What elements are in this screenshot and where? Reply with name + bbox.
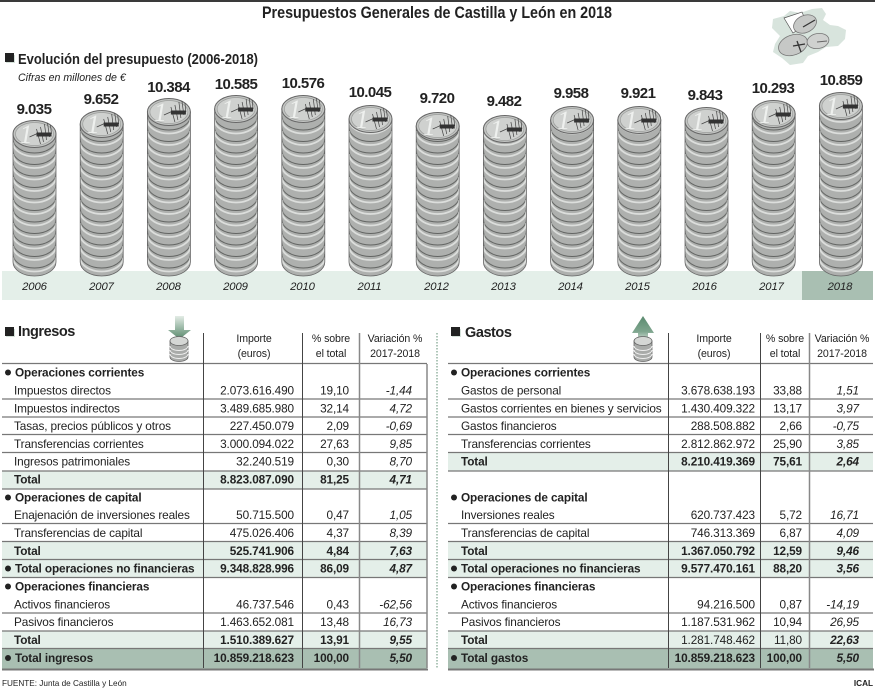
row: total operaciones no financieras: 9.577.470.161 xyxy=(681,562,756,576)
row: total: 9,55 xyxy=(390,633,413,647)
row: total: 9,46 xyxy=(837,544,860,558)
row xyxy=(14,402,413,416)
section: Operaciones de capital: Operaciones de capital xyxy=(15,490,142,504)
section: Operaciones corrientes: Operaciones corrientes xyxy=(15,366,145,380)
section: Operaciones financieras: Operaciones financieras xyxy=(15,580,150,594)
row: total: 13,91 xyxy=(320,633,350,647)
row: 4,37 xyxy=(327,526,349,540)
row: Inversiones reales xyxy=(461,508,555,522)
row: 1.463.652.081 xyxy=(220,615,294,629)
row: Transferencias corrientes xyxy=(14,437,144,451)
column headers: el total xyxy=(316,348,346,360)
icon: map of Castilla y León with coins xyxy=(772,8,846,65)
row: total operaciones no financieras xyxy=(5,562,414,576)
row: 32.240.519 xyxy=(236,454,294,468)
row: total ingresos: 100,00 xyxy=(314,651,350,665)
row: -62,56 xyxy=(379,598,413,612)
title: Presupuestos Generales de Castilla y León en 2018 xyxy=(262,4,612,22)
row: 50.715.500 xyxy=(236,508,295,522)
row: Impuestos indirectos xyxy=(14,402,120,416)
row: total operaciones no financieras: Total operaciones no financieras xyxy=(15,562,195,576)
column headers: (euros) xyxy=(238,348,270,360)
row xyxy=(14,615,413,629)
row: 6,87 xyxy=(780,526,802,540)
row: total operaciones no financieras: 86,09 xyxy=(320,562,350,576)
row: Enajenación de inversiones reales xyxy=(14,508,190,522)
stack 2018: 10.859 xyxy=(820,72,862,89)
row: Ingresos patrimoniales xyxy=(14,454,130,468)
row: 227.450.079 xyxy=(230,419,294,433)
row: Pasivos financieros xyxy=(14,615,114,629)
stack 2011: 10.045 xyxy=(349,84,391,101)
row: total xyxy=(14,633,413,647)
row xyxy=(461,384,859,398)
row: total xyxy=(461,454,860,468)
row: total xyxy=(461,544,860,558)
row: total gastos: Total gastos xyxy=(461,651,529,665)
row: total gastos: 5,50 xyxy=(837,651,860,665)
row: total ingresos xyxy=(5,651,413,665)
row: 3.678.638.193 xyxy=(681,384,756,398)
row: 13,17 xyxy=(773,402,802,416)
stack 2010 xyxy=(282,75,325,276)
column headers: % sobre xyxy=(766,333,804,345)
row: total operaciones no financieras: 3,56 xyxy=(837,562,860,576)
row: total: 11,80 xyxy=(774,633,803,647)
column headers: Importe xyxy=(236,333,272,345)
row: 0,87 xyxy=(780,598,802,612)
row: total xyxy=(14,544,413,558)
row: 3.000.094.022 xyxy=(220,437,294,451)
year band: 2008 xyxy=(155,281,182,293)
column headers xyxy=(696,333,870,360)
row: 0,47 xyxy=(327,508,349,522)
row: 620.737.423 xyxy=(691,508,756,522)
row shading xyxy=(448,453,873,668)
row: 27,63 xyxy=(320,437,350,451)
row: 746.313.369 xyxy=(691,526,755,540)
row: 10,94 xyxy=(773,615,803,629)
panel: Ingresos xyxy=(2,316,428,670)
row: 26,95 xyxy=(829,615,860,629)
row: 8,39 xyxy=(390,526,413,540)
subtitle: units: Cifras en millones de € xyxy=(18,72,127,84)
row: 475.026.406 xyxy=(230,526,295,540)
row: 8,70 xyxy=(390,454,413,468)
row: total ingresos: 5,50 xyxy=(390,651,413,665)
row xyxy=(14,419,413,433)
year band: 2012 xyxy=(423,281,450,293)
row: total: 7,63 xyxy=(390,544,413,558)
row: 94.216.500 xyxy=(697,598,756,612)
stack 2015 xyxy=(618,85,661,276)
year band: 2017 xyxy=(758,281,785,293)
stack 2011 xyxy=(349,84,392,276)
row xyxy=(14,526,413,540)
column headers: Variación % xyxy=(368,333,423,345)
stack 2017: 10.293 xyxy=(752,80,794,97)
row: 33,88 xyxy=(773,384,803,398)
year band: 2011 xyxy=(357,281,381,293)
column headers xyxy=(236,333,423,360)
row: Impuestos directos xyxy=(14,384,111,398)
stack 2018 xyxy=(819,72,862,276)
row xyxy=(14,508,413,522)
row: total: 12,59 xyxy=(773,544,803,558)
row: -0,69 xyxy=(386,419,413,433)
row: total operaciones no financieras xyxy=(451,562,860,576)
row: 9,85 xyxy=(390,437,413,451)
stack 2015: 9.921 xyxy=(621,85,656,102)
stack 2016 xyxy=(685,87,728,276)
row: Activos financieros xyxy=(14,598,110,612)
column headers: el total xyxy=(770,348,800,360)
row: Transferencias de capital xyxy=(461,526,589,540)
year band xyxy=(2,271,873,300)
stack 2014 xyxy=(551,85,594,276)
row xyxy=(461,526,860,540)
row: total operaciones no financieras: 88,20 xyxy=(773,562,803,576)
row: Gastos corrientes en bienes y servicios xyxy=(461,402,662,416)
row: total operaciones no financieras: Total operaciones no financieras xyxy=(461,562,641,576)
row: total operaciones no financieras: 4,87 xyxy=(389,562,414,576)
stack 2012: 9.720 xyxy=(420,90,455,107)
row: 3.489.685.980 xyxy=(220,402,295,416)
column headers: (euros) xyxy=(698,348,730,360)
row: 3,85 xyxy=(837,437,860,451)
stack 2016: 9.843 xyxy=(688,87,723,104)
column headers: Importe xyxy=(696,333,732,345)
row: total: 8.823.087.090 xyxy=(220,472,295,486)
row: total ingresos: 10.859.218.623 xyxy=(214,651,295,665)
stack 2007: 9.652 xyxy=(84,91,119,108)
stack 2006: 9.035 xyxy=(17,101,52,118)
divider xyxy=(436,333,438,669)
row: 16,71 xyxy=(830,508,859,522)
table rules xyxy=(2,333,428,670)
row shading xyxy=(2,471,427,668)
stack 2009 xyxy=(215,76,258,276)
icon: down arrow with coins xyxy=(168,316,191,362)
stack 2008 xyxy=(147,79,191,276)
row: total: Total xyxy=(461,544,488,558)
row: total: 8.210.419.369 xyxy=(681,454,756,468)
row: Activos financieros xyxy=(461,598,557,612)
row: total: 2,64 xyxy=(836,454,860,468)
stack 2012 xyxy=(416,90,459,276)
year band: 2014 xyxy=(557,281,583,293)
row: 2.812.862.972 xyxy=(681,437,755,451)
coin stack chart xyxy=(13,72,862,276)
row: Pasivos financieros xyxy=(461,615,561,629)
year band: 2013 xyxy=(490,281,517,293)
row: total ingresos: Total ingresos xyxy=(15,651,94,665)
row xyxy=(461,402,860,416)
icon: up arrow with coins xyxy=(632,316,654,362)
stack 2013: 9.482 xyxy=(487,93,522,110)
row: total: 1.281.748.462 xyxy=(681,633,755,647)
row: 3,97 xyxy=(837,402,860,416)
row xyxy=(14,454,413,468)
stack 2008: 10.384 xyxy=(147,79,191,96)
column headers: 2017-2018 xyxy=(370,348,420,360)
row: Tasas, precios públicos y otros xyxy=(14,419,171,433)
year band: 2010 xyxy=(289,281,316,293)
row: 16,73 xyxy=(383,615,413,629)
heading: Evolución del presupuesto: Evolución del presupuesto (2006-2018) xyxy=(18,52,258,68)
stack 2006 xyxy=(13,101,56,276)
row: total xyxy=(14,472,412,486)
row: Transferencias de capital xyxy=(14,526,142,540)
row: total: 4,84 xyxy=(327,544,350,558)
year band: 2006 xyxy=(21,281,48,293)
row: 46.737.546 xyxy=(236,598,295,612)
row: total: Total xyxy=(461,633,488,647)
stack 2014: 9.958 xyxy=(554,85,589,102)
source footer: FUENTE: Junta de Castilla y León xyxy=(2,679,127,688)
row: 25,90 xyxy=(773,437,803,451)
row: 0,30 xyxy=(327,454,350,468)
column headers: Variación % xyxy=(815,333,870,345)
row xyxy=(461,437,860,451)
row: total xyxy=(461,633,860,647)
year band: 2015 xyxy=(624,281,651,293)
stack 2007 xyxy=(80,91,123,276)
row: 1,51 xyxy=(837,384,859,398)
row: 5,72 xyxy=(780,508,802,522)
row: total: Total xyxy=(14,472,41,486)
stack 2013 xyxy=(483,93,526,276)
row: total: 1.367.050.792 xyxy=(681,544,756,558)
row xyxy=(14,384,413,398)
row: 4,72 xyxy=(390,402,413,416)
row: 2,66 xyxy=(780,419,803,433)
row: 1,05 xyxy=(390,508,413,522)
heading: Gastos: Gastos xyxy=(465,325,512,341)
row: total: 525.741.906 xyxy=(230,544,295,558)
row: total: Total xyxy=(461,454,488,468)
row: total: 4,71 xyxy=(389,472,412,486)
row: total gastos xyxy=(451,651,860,665)
row: total: Total xyxy=(14,544,41,558)
section: Operaciones de capital: Operaciones de capital xyxy=(461,490,588,504)
row: -0,75 xyxy=(833,419,860,433)
stack 2010: 10.576 xyxy=(282,75,324,92)
row: -1,44 xyxy=(386,384,413,398)
row: total: 1.510.389.627 xyxy=(220,633,295,647)
row xyxy=(461,598,860,612)
stack 2017 xyxy=(752,80,795,276)
row: total gastos: 100,00 xyxy=(767,651,803,665)
row: 2,09 xyxy=(327,419,349,433)
row: 19,10 xyxy=(320,384,350,398)
section: Operaciones corrientes: Operaciones corrientes xyxy=(461,366,591,380)
row: 13,48 xyxy=(320,615,350,629)
row: 0,43 xyxy=(327,598,350,612)
row: 4,09 xyxy=(837,526,860,540)
row xyxy=(14,437,413,451)
row: -14,19 xyxy=(826,598,860,612)
row: total: 22,63 xyxy=(829,633,860,647)
row xyxy=(461,419,860,433)
top rule xyxy=(0,0,875,2)
column headers: % sobre xyxy=(312,333,350,345)
table rules xyxy=(448,333,874,670)
row xyxy=(14,598,413,612)
row: 32,14 xyxy=(320,402,350,416)
row: 2.073.616.490 xyxy=(220,384,295,398)
row: total: 75,61 xyxy=(773,454,803,468)
row: total gastos: 10.859.218.623 xyxy=(675,651,756,665)
year band: 2007 xyxy=(88,281,115,293)
heading: Ingresos: Ingresos xyxy=(18,324,75,340)
row xyxy=(461,615,860,629)
row xyxy=(461,508,859,522)
row: Gastos de personal xyxy=(461,384,561,398)
year band: 2018 xyxy=(827,281,853,293)
panel: Gastos xyxy=(448,316,874,670)
year band: 2009 xyxy=(222,281,249,293)
year band: 2016 xyxy=(691,281,718,293)
row: Gastos financieros xyxy=(461,419,557,433)
credit: ICAL: ICAL xyxy=(854,679,873,688)
row: 288.508.882 xyxy=(691,419,755,433)
stack 2009: 10.585 xyxy=(215,76,257,93)
row: total: Total xyxy=(14,633,41,647)
row: 1.430.409.322 xyxy=(681,402,755,416)
column headers: 2017-2018 xyxy=(817,348,867,360)
row: Transferencias corrientes xyxy=(461,437,591,451)
row: total operaciones no financieras: 9.348.828.996 xyxy=(220,562,295,576)
row: total: 81,25 xyxy=(320,472,350,486)
row: 1.187.531.962 xyxy=(681,615,755,629)
section: Operaciones financieras: Operaciones financieras xyxy=(461,580,596,594)
